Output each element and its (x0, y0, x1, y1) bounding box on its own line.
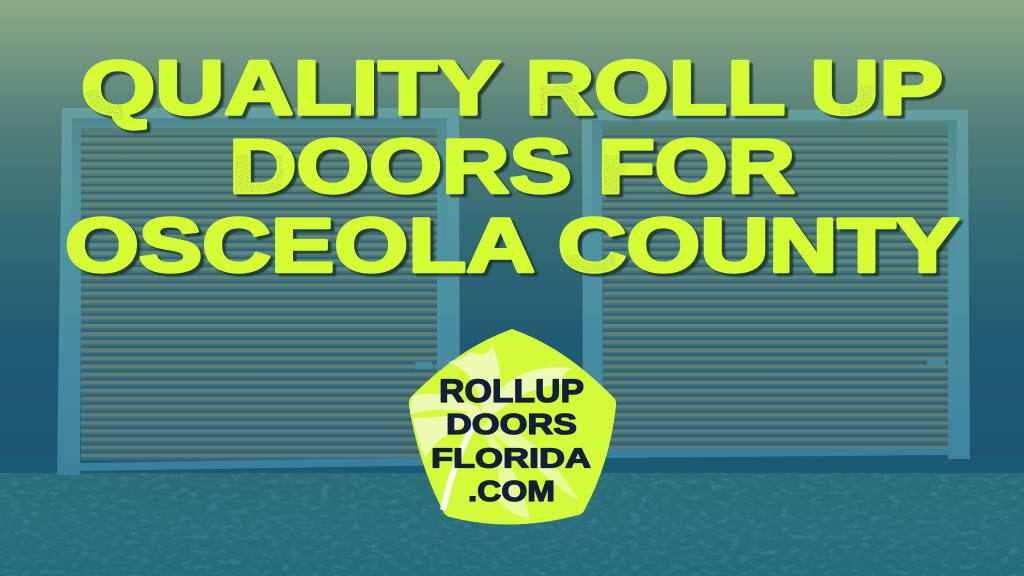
title line 2: DOORS FOR (229, 124, 795, 210)
palm trunk (443, 412, 481, 510)
right door threshold (603, 449, 948, 458)
title shadow: QUALITY ROLL UP (84, 49, 946, 134)
title (66, 58, 964, 278)
left roll up door (57, 108, 460, 475)
right door latch (927, 358, 945, 365)
left door latch (415, 362, 432, 369)
title shadow: OSCEOLA COUNTY (68, 206, 962, 292)
logo badge (409, 329, 616, 525)
badge shape (409, 329, 616, 525)
title line 1: QUALITY ROLL UP (81, 46, 943, 131)
left door threshold (80, 457, 460, 471)
logo text: ROLLUP (439, 373, 584, 409)
title shadow (68, 49, 962, 292)
distressed speckle on title letters (78, 85, 885, 273)
right door frame (582, 110, 970, 459)
palm frond fills (410, 346, 578, 520)
logo text: DOORS (446, 409, 577, 441)
grass ground (0, 456, 1024, 576)
icon: palm tree (410, 346, 578, 520)
title line 3: OSCEOLA COUNTY (65, 204, 959, 288)
logo text: FLORIDA (431, 442, 591, 474)
right door curtain (603, 123, 948, 449)
logo text (431, 373, 591, 508)
right roll up door (582, 110, 970, 459)
logo text: .COM (468, 476, 555, 508)
left door curtain (81, 128, 437, 461)
title shadow: DOORS FOR (232, 128, 798, 212)
left door frame (57, 108, 460, 475)
